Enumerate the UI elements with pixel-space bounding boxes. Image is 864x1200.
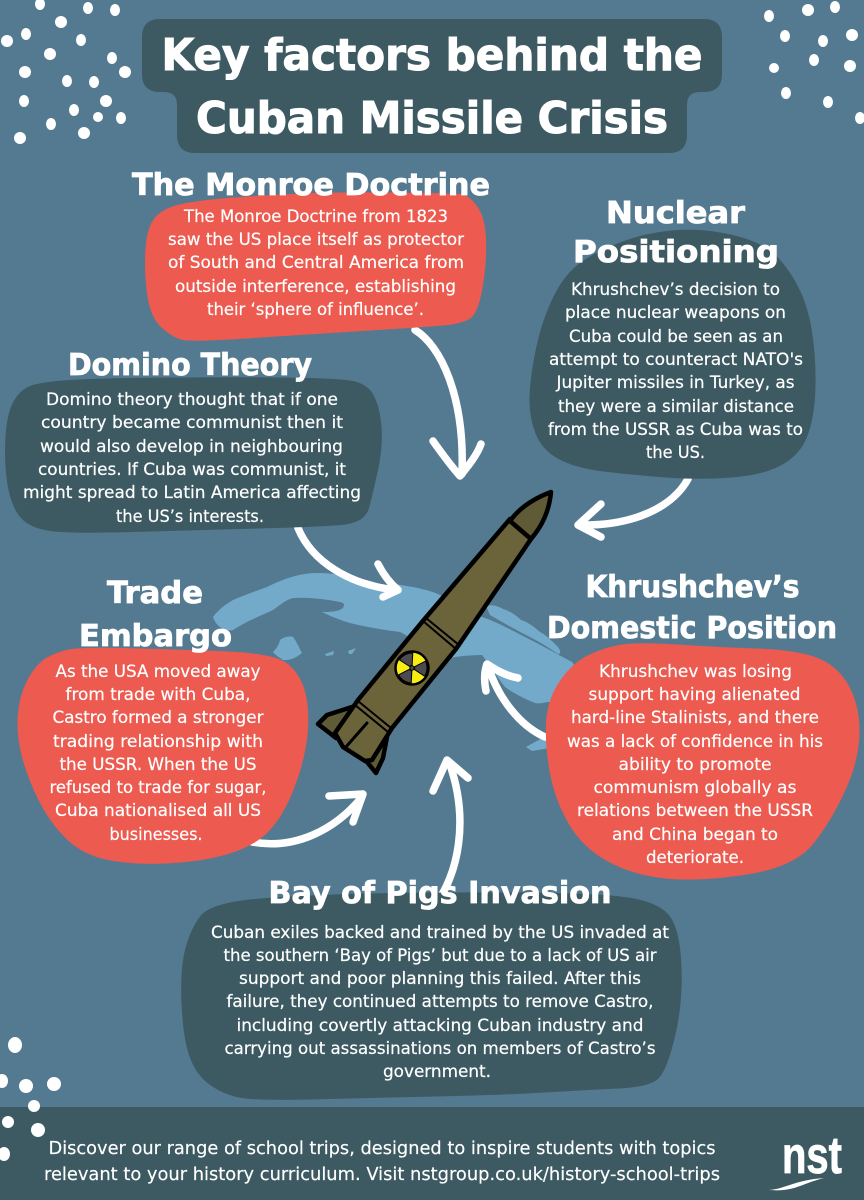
dots: bottom left — [0, 1037, 61, 1161]
Khrushchev text — [567, 662, 823, 867]
Khrushchev text: relations between the USSR — [577, 801, 813, 820]
Nuclear blob — [529, 230, 816, 479]
panel: Trade Embargo — [17, 576, 308, 864]
Bay of Pigs text: the southern ‘Bay of Pigs’ but due to a lack of US air — [224, 946, 657, 965]
Khrushchev text: support having alienated — [588, 685, 800, 704]
Nuclear text: place nuclear weapons on — [565, 303, 786, 322]
panel: Domino Theory — [5, 348, 382, 533]
arrow: Khrushchev to missile — [485, 664, 545, 737]
Trade heading: Embargo — [79, 619, 232, 654]
Bay of Pigs text: support and poor planning this failed. After this — [239, 969, 641, 988]
Domino text: would also develop in neighbouring — [40, 437, 343, 456]
dots: top right — [764, 1, 864, 124]
unlabelled islands belong to the map group — [273, 636, 302, 660]
Trade text: trading relationship with — [53, 732, 263, 751]
panel: Nuclear Positioning — [529, 196, 816, 479]
Domino blob — [5, 377, 382, 533]
title text: Key factors behind the — [162, 30, 702, 81]
Monroe text: The Monroe Doctrine from 1823 — [183, 207, 448, 226]
Monroe blob — [145, 192, 486, 341]
arrow: Trade Embargo to missile — [252, 794, 363, 844]
Trade text: As the USA moved away — [56, 662, 261, 681]
arrow: Nuclear Positioning to missile — [578, 479, 688, 537]
title — [142, 19, 722, 153]
Domino text: the US’s interests. — [116, 507, 264, 526]
Domino text — [23, 390, 361, 526]
Trade text: Castro formed a stronger — [52, 708, 264, 727]
Monroe text: outside interference, establishing — [175, 277, 456, 296]
Domino heading: Domino Theory — [68, 348, 312, 383]
Trade heading — [79, 576, 232, 654]
Khrushchev text: ability to promote — [618, 755, 772, 774]
Trade text: businesses. — [110, 825, 202, 844]
title backing shape — [142, 19, 722, 153]
Trade text — [50, 662, 266, 844]
Monroe text: saw the US place itself as protector — [168, 230, 464, 249]
Trade text: from trade with Cuba, — [66, 685, 250, 704]
Nuclear text: Cuba could be seen as an — [569, 327, 783, 346]
arrow: Domino Theory to missile — [298, 528, 398, 597]
missile — [318, 492, 551, 773]
Nuclear text: attempt to counteract NATO's — [549, 350, 803, 369]
Khrushchev heading: Khrushchev’s — [586, 570, 800, 605]
Nuclear text: Khrushchev’s decision to — [571, 280, 780, 299]
dots: top left — [1, 0, 131, 144]
Trade text: the USSR. When the US — [60, 755, 256, 774]
Bay of Pigs text: carrying out assassinations on members of Castro’s — [224, 1039, 656, 1058]
Nuclear heading — [573, 196, 779, 270]
Domino text: Domino theory thought that if one — [46, 390, 338, 409]
Nuclear heading: Nuclear — [606, 196, 745, 231]
Nuclear text: from the USSR as Cuba was to — [548, 420, 803, 439]
Monroe heading: The Monroe Doctrine — [132, 168, 490, 203]
Bay of Pigs blob — [181, 892, 682, 1100]
Khrushchev text: was a lack of confidence in his — [567, 732, 823, 751]
Bay of Pigs text: including covertly attacking Cuban industry and — [236, 1016, 644, 1035]
Domino text: country became communist then it — [41, 413, 344, 432]
Khrushchev text: deteriorate. — [646, 848, 744, 867]
panel: Khrushchev's Domestic Position — [546, 570, 860, 880]
Bay of Pigs text — [211, 923, 670, 1081]
Nuclear heading: Positioning — [573, 235, 779, 270]
Nuclear text: Jupiter missiles in Turkey, as — [555, 373, 794, 392]
footer text: relevant to your history curriculum. Visit nstgroup.co.uk/history-school-trips — [44, 1165, 720, 1185]
Monroe text — [168, 207, 464, 319]
logo wordmark: nst — [782, 1127, 842, 1185]
Khrushchev text: Khrushchev was losing — [599, 662, 792, 681]
Khrushchev text: communism globally as — [594, 778, 796, 797]
logo: nst — [769, 1127, 842, 1190]
logo swoosh — [769, 1178, 824, 1190]
panel: Bay of Pigs Invasion — [181, 876, 682, 1100]
Trade blob — [17, 648, 308, 864]
missile fin right — [367, 737, 387, 773]
Nuclear text: they were a similar distance — [558, 397, 794, 416]
Khrushchev heading — [547, 570, 837, 646]
map of Cuba — [213, 573, 600, 751]
Monroe text: their ‘sphere of influence’. — [207, 300, 424, 319]
footer text: Discover our range of school trips, designed to inspire students with topics — [48, 1139, 716, 1159]
Trade text: refused to trade for sugar, — [50, 778, 266, 797]
arrow: Bay of Pigs to missile — [433, 760, 468, 905]
missile fin left — [318, 707, 352, 738]
panel: Monroe Doctrine — [132, 168, 490, 341]
missile bands — [345, 618, 459, 748]
Bay of Pigs text: failure, they continued attempts to remove Castro, — [226, 992, 654, 1011]
footer band — [0, 1107, 864, 1200]
Bay of Pigs text: government. — [383, 1062, 491, 1081]
Domino text: countries. If Cuba was communist, it — [38, 460, 347, 479]
arrow: Monroe Doctrine to missile — [415, 330, 481, 476]
Nuclear text: the US. — [646, 443, 705, 462]
Trade heading: Trade — [107, 576, 203, 611]
Monroe text: of South and Central America from — [168, 253, 464, 272]
Bay of Pigs text: Cuban exiles backed and trained by the US invaded at — [211, 923, 670, 942]
title text: Cuban Missile Crisis — [196, 93, 668, 144]
Bay of Pigs heading: Bay of Pigs Invasion — [268, 876, 612, 911]
title text — [162, 30, 702, 144]
Khrushchev text: and China began to — [612, 825, 778, 844]
missile nose — [510, 492, 551, 539]
radiation symbol — [396, 651, 428, 685]
Khrushchev blob — [546, 643, 860, 880]
Trade text: Cuba nationalised all US — [55, 801, 261, 820]
footer text — [44, 1139, 720, 1185]
Domino text: might spread to Latin America affecting — [23, 483, 361, 502]
Khrushchev text: hard-line Stalinists, and there — [571, 708, 819, 727]
Khrushchev heading: Domestic Position — [547, 611, 837, 646]
Nuclear text — [548, 280, 803, 462]
missile body — [335, 519, 531, 761]
